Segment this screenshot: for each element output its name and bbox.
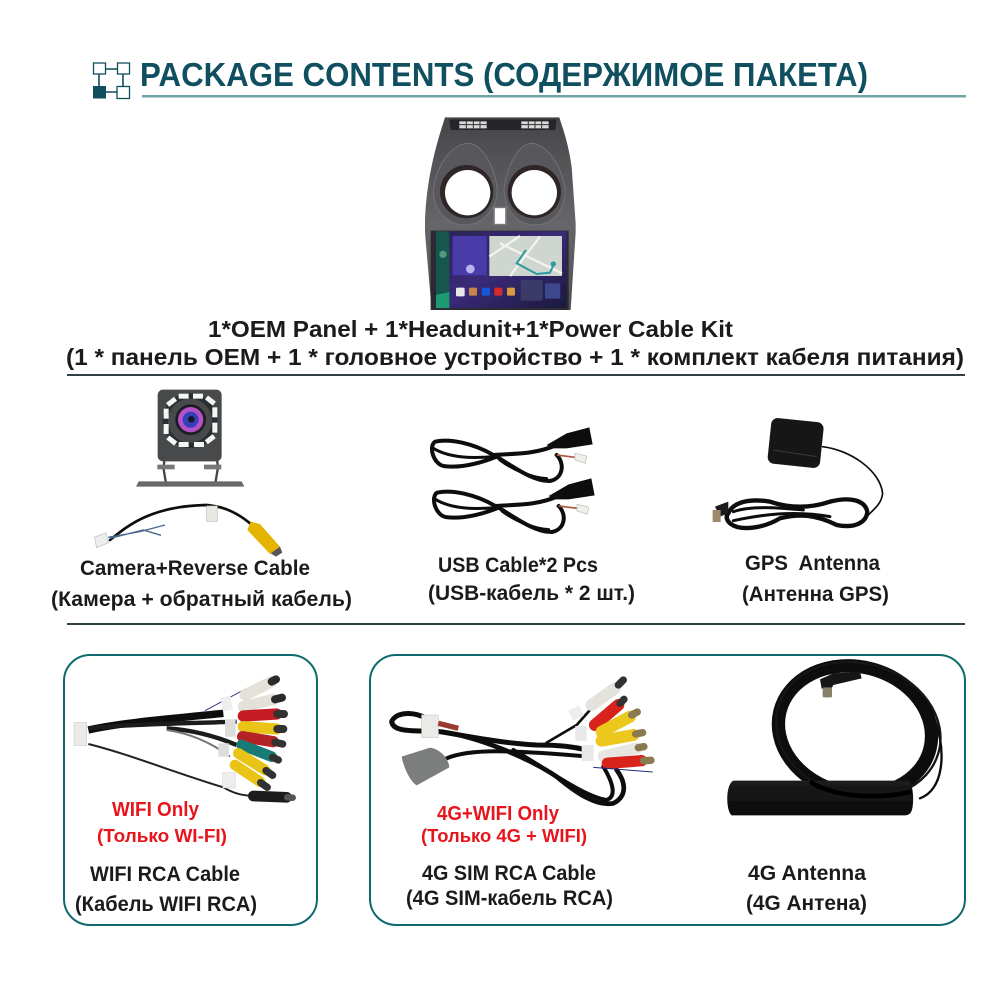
badge: 4G+WIFI only in Russian: (Только 4G + WIFI) [421,825,587,846]
label: USB cable: USB Cable*2 Pcs [438,553,598,577]
label: 4G SIM RCA cable in Russian: (4G SIM-кабель RCA) [406,886,613,910]
title: PACKAGE CONTENTS (СОДЕРЖИМОЕ ПАКЕТА) [140,56,868,93]
label: camera cable in Russian: (Камера + обратный кабель) [51,587,352,611]
badge: WIFI only in Russian: (Только WI-FI) [97,825,227,846]
label: camera cable: Camera+Reverse Cable [80,556,310,580]
icon: two USB cables [432,427,595,532]
icon: title network squares [93,63,130,98]
icon: reversing camera and cable [94,390,282,557]
icon: 4G antenna [727,643,957,817]
panel: 4G cables and antenna [370,643,965,925]
heading: headunit kit: 1*OEM Panel + 1*Headunit+1*Power Cable Kit [208,316,733,342]
label: USB cable in Russian: (USB-кабель * 2 шт.) [428,581,635,605]
badge: 4G+WIFI only: 4G+WIFI Only [437,803,560,825]
icon: 4G SIM RCA cable [392,680,653,804]
label: 4G SIM RCA cable: 4G SIM RCA Cable [422,861,596,885]
label: 4G antenna in Russian: (4G Антена) [746,891,867,915]
label: GPS antenna: GPS Antenna [745,551,881,575]
label: GPS antenna in Russian: (Антенна GPS) [742,582,889,606]
head unit with OEM panel [425,117,576,310]
badge: WIFI only: WIFI Only [112,799,200,821]
label: WIFI RCA cable: WIFI RCA Cable [90,862,240,886]
panel: WIFI RCA cable [64,655,317,925]
icon: GPS antenna [713,417,883,528]
icon: WIFI RCA cable [74,679,293,798]
label: 4G antenna: 4G Antenna [748,861,867,885]
label: WIFI RCA cable in Russian: (Кабель WIFI RCA) [75,892,257,916]
text: headunit kit in Russian: (1 * панель OEM + 1 * головное устройство + 1 * комплект кабеля питания) [66,344,964,370]
